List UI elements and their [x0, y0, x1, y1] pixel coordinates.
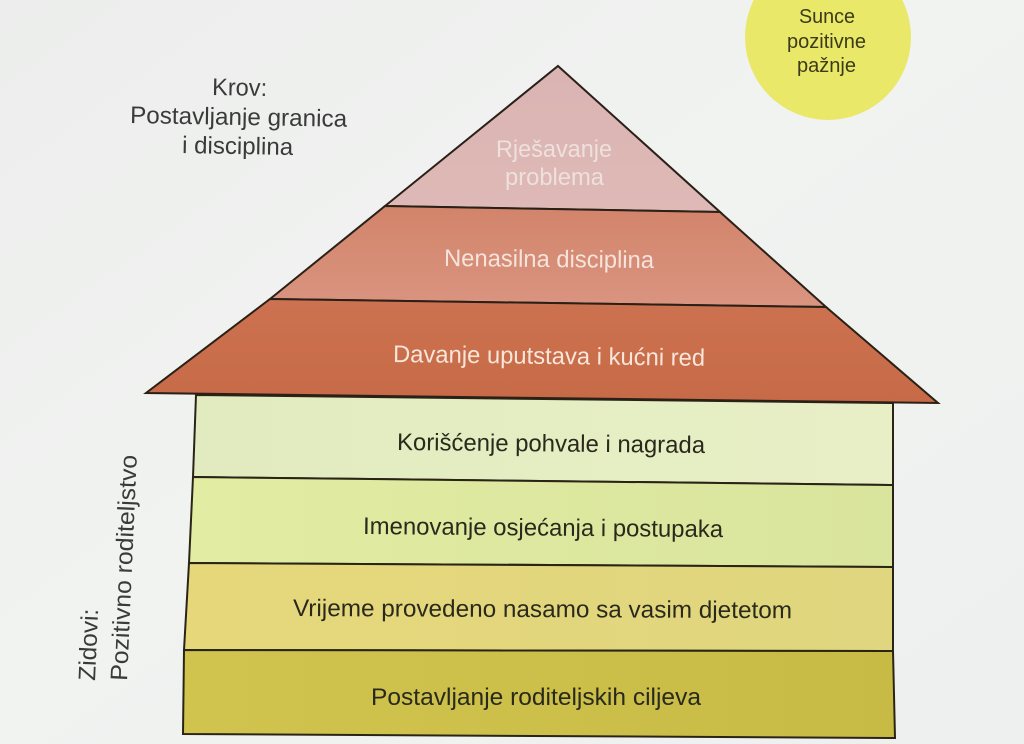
roof tier: non-violent discipline	[270, 206, 826, 307]
icon: sun of positive attention: pozitivne	[787, 30, 866, 53]
roof tier: instructions and house rules: Davanje uputstava i kućni red	[393, 341, 705, 372]
wall tier: praise and rewards: Korišćenje pohvale i nagrada	[397, 429, 706, 459]
roof tier: problem solving	[385, 66, 720, 212]
icon: sun of positive attention	[745, 0, 911, 120]
wall tier: naming feelings and actions	[189, 477, 893, 567]
wall tier: praise and rewards	[193, 395, 893, 485]
heading: roof label: Krov:	[212, 74, 267, 102]
icon: sun of positive attention: pažnje	[797, 54, 856, 77]
side label: walls: Zidovi:	[74, 608, 104, 681]
roof tier: problem solving: Rješavanje	[496, 136, 612, 163]
side label: walls: Pozitivno roditeljstvo	[106, 454, 143, 681]
wall tier: parenting goals	[183, 650, 895, 738]
icon: sun of positive attention: Sunce	[799, 5, 855, 28]
roof tier: non-violent discipline: Nenasilna disciplina	[444, 245, 655, 274]
panel: roof	[146, 66, 938, 403]
heading: roof label: i disciplina	[182, 132, 294, 161]
side label: walls	[74, 454, 143, 681]
wall tier: parenting goals: Postavljanje roditeljskih ciljeva	[371, 684, 702, 711]
roof tier: problem solving: problema	[505, 164, 605, 191]
wall tier: time alone with child: Vrijeme provedeno nasamo sa vasim djetetom	[293, 595, 792, 624]
heading: roof label	[130, 74, 348, 161]
wall tier: naming feelings and actions: Imenovanje osjećanja i postupaka	[363, 513, 724, 543]
heading: roof label: Postavljanje granica	[130, 102, 348, 133]
roof tier: instructions and house rules	[146, 299, 938, 403]
panel: walls	[183, 395, 895, 738]
wall tier: time alone with child	[184, 563, 893, 651]
